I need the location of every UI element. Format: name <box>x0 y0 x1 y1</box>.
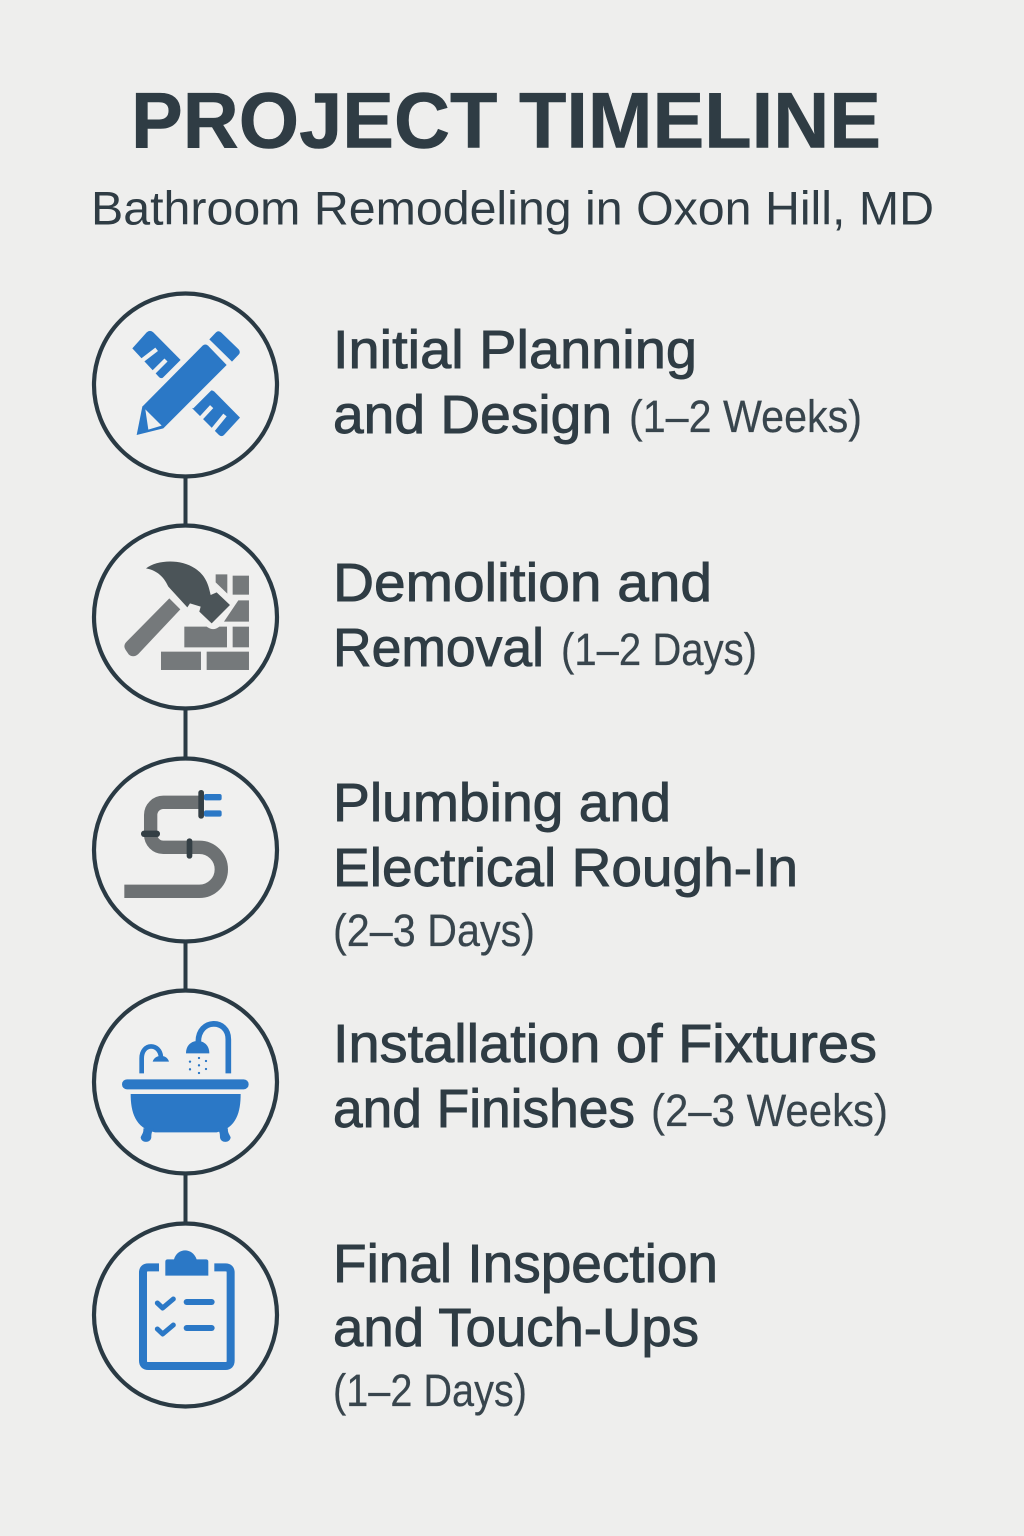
step 5 text <box>333 1234 718 1416</box>
step 3 text <box>333 773 798 956</box>
step 2 circle <box>94 526 277 708</box>
step 3 text: Plumbing and <box>333 773 671 833</box>
step 4 text: (2–3 Weeks) <box>651 1085 888 1136</box>
icon: hammer and bricks <box>124 561 249 670</box>
step 4: fixtures and finishes <box>94 990 888 1174</box>
step 5 circle <box>94 1224 277 1406</box>
step 4 text: and Finishes <box>333 1079 635 1139</box>
step 4 text <box>333 1014 888 1139</box>
icon: bathtub and shower <box>122 1024 249 1142</box>
title: PROJECT TIMELINE <box>131 76 881 164</box>
step 3 text: (2–3 Days) <box>333 905 535 956</box>
icon: ruler and pencil <box>132 331 240 436</box>
step 1 text: and Design <box>333 385 612 445</box>
subtitle: Bathroom Remodeling in Oxon Hill, MD <box>91 182 934 234</box>
step 5 text: Final Inspection <box>333 1234 718 1294</box>
step 3: plumbing and electrical <box>94 758 798 956</box>
step 2 text <box>333 553 757 678</box>
step 1 text: Initial Planning <box>333 320 697 380</box>
step 4 circle <box>94 990 277 1174</box>
step 2 text: (1–2 Days) <box>561 624 757 675</box>
step 2 text: Removal <box>333 618 544 678</box>
step 1: planning and design <box>94 294 862 476</box>
icon: clipboard checklist <box>143 1250 231 1366</box>
step 3 circle <box>94 758 277 942</box>
step 5: final inspection <box>94 1224 718 1416</box>
step 2: demolition and removal <box>94 526 757 708</box>
step 5 text: (1–2 Days) <box>333 1365 527 1416</box>
step 1 text <box>333 320 862 445</box>
step 2 text: Demolition and <box>333 553 712 613</box>
icon: pipe and plug <box>124 790 222 891</box>
step 1 text: (1–2 Weeks) <box>629 391 862 442</box>
timeline connectors <box>184 476 188 1223</box>
step 3 text: Electrical Rough-In <box>333 838 798 898</box>
step 4 text: Installation of Fixtures <box>333 1014 877 1074</box>
step 5 text: and Touch-Ups <box>333 1298 699 1358</box>
step 1 circle <box>94 294 277 476</box>
